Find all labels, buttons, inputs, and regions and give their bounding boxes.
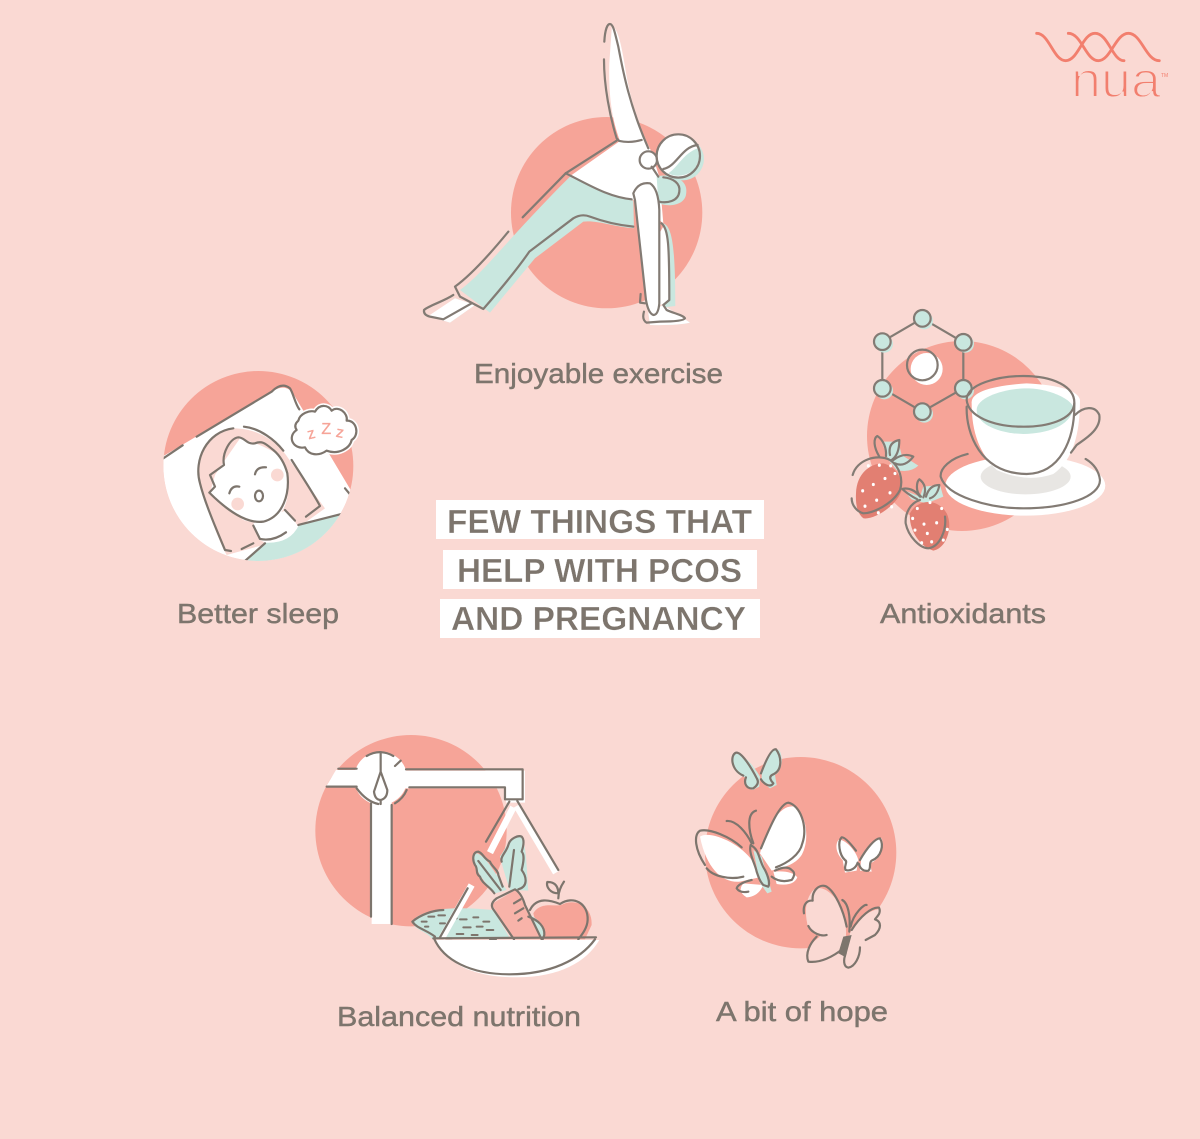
logo: nua: nua (1071, 52, 1161, 108)
head and bun (640, 134, 704, 205)
title: AND PREGNANCY (451, 600, 746, 637)
title (436, 500, 764, 638)
strawberry right (902, 479, 949, 551)
panel: enjoyable exercise illustration (424, 24, 704, 325)
saucer (945, 456, 1105, 516)
leafy greens (412, 908, 510, 939)
standing leg (430, 223, 690, 325)
bowl (433, 937, 599, 977)
strawberry left (852, 436, 918, 518)
molecule (874, 310, 974, 423)
title: HELP WITH PCOS (457, 552, 742, 589)
logo: nua: TM (1161, 73, 1168, 79)
carrot tops (473, 836, 528, 893)
label: balanced nutrition: Balanced nutrition (337, 1001, 581, 1032)
figure outlines (424, 24, 685, 323)
label: better sleep: Better sleep (177, 598, 339, 629)
panel: balanced nutrition illustration (315, 735, 599, 977)
butterfly pink lower (804, 886, 882, 968)
panel: better sleep illustration (164, 371, 359, 561)
label: enjoyable exercise: Enjoyable exercise (474, 358, 723, 389)
apple (530, 882, 592, 939)
hanger strip lower (440, 885, 472, 938)
icon: thought cloud: Z (321, 421, 331, 438)
clipped circle scene (164, 371, 354, 561)
butterfly white large (696, 803, 806, 897)
teacup (941, 376, 1100, 508)
icon: thought cloud: z (306, 425, 317, 443)
icon: thought cloud (292, 406, 356, 454)
label: a bit of hope: A bit of hope (716, 996, 888, 1027)
butterfly mint top (732, 749, 782, 790)
scale structure (326, 752, 558, 924)
supporting arm (633, 183, 659, 315)
mint trousers (460, 177, 634, 313)
logo: nua (1037, 33, 1168, 108)
icon: thought cloud: z (335, 424, 345, 442)
title: FEW THINGS THAT (447, 503, 752, 540)
label: antioxidants: Antioxidants (880, 598, 1046, 629)
butterfly white small (836, 837, 883, 873)
panel: a bit of hope illustration (696, 749, 896, 968)
panel: antioxidants illustration (852, 310, 1105, 551)
carrot (492, 889, 544, 939)
white torso and raised arm (572, 25, 663, 223)
